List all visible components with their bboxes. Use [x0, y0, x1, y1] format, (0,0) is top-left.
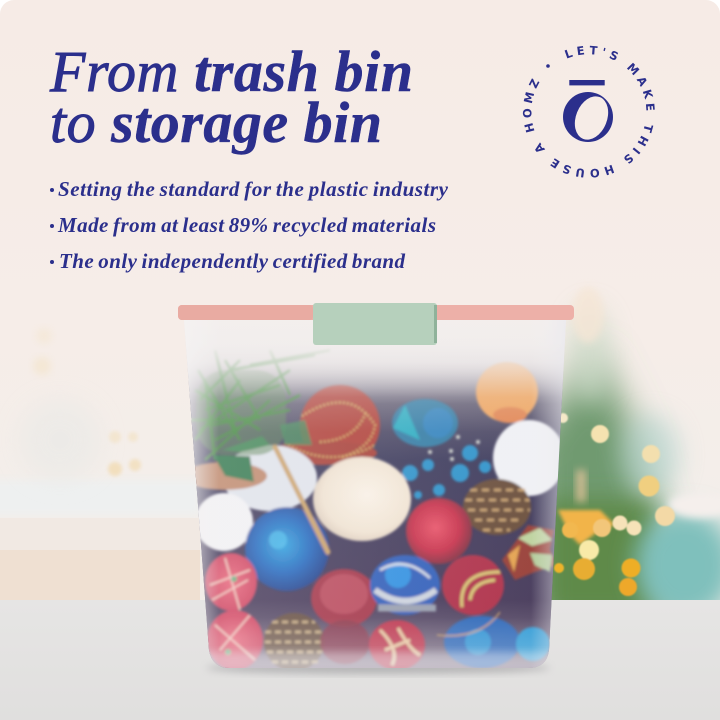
- white ornament top right: [493, 420, 565, 496]
- lid rim: [178, 305, 574, 320]
- blue ball lower: [444, 616, 520, 668]
- bin contents: [180, 320, 570, 672]
- marble table: [0, 600, 720, 720]
- logo: o with macron: [563, 80, 614, 145]
- left wreath ornament: [183, 462, 267, 490]
- pine cone right: [463, 479, 531, 535]
- orange flower: [476, 362, 538, 422]
- window sill and wall left: [0, 328, 200, 600]
- wooden stick: [275, 447, 328, 552]
- white ornament behind stick: [223, 445, 317, 511]
- storage bin with ornaments: [178, 303, 574, 674]
- circular slogan: LET'S MAKE THIS HOUSE A HOMZ: [522, 46, 655, 178]
- small blue ball: [516, 627, 550, 661]
- bullet list: [50, 177, 449, 273]
- title: to storage bin: [50, 90, 382, 155]
- greenery: [190, 350, 330, 482]
- red felt ornament: [267, 385, 380, 465]
- pink ball upper: [205, 553, 257, 611]
- pink ball lower: [207, 610, 263, 670]
- blurred Christmas tree: [552, 288, 720, 600]
- frosted plastic overlay: [180, 320, 570, 672]
- red glitter ball: [311, 569, 377, 627]
- bokeh lights: [554, 413, 675, 596]
- bullet: recycled materials: Made from at least 89% recycled materials: [57, 213, 436, 237]
- green latch handle: [313, 303, 437, 345]
- red ball with pattern: [320, 620, 370, 664]
- blue striped ball: [370, 555, 440, 615]
- pine cone lower: [264, 613, 324, 671]
- bin shadow: [206, 662, 550, 674]
- badge: Let's make this house a Homz: [522, 46, 655, 178]
- bullet: certified brand: The only independently certified brand: [59, 249, 406, 273]
- blue beads: [402, 445, 491, 499]
- title: [49, 39, 413, 155]
- red ball: [406, 498, 472, 564]
- teal ornament: [392, 399, 458, 447]
- blue ball: [245, 507, 329, 591]
- white ball left: [195, 493, 253, 551]
- butterfly ornament: [502, 525, 558, 580]
- red gold ball: [442, 555, 504, 615]
- cream ball: [313, 457, 411, 541]
- title: From trash bin: [49, 39, 413, 104]
- bullet: plastic industry standard: Setting the standard for the plastic industry: [58, 177, 449, 201]
